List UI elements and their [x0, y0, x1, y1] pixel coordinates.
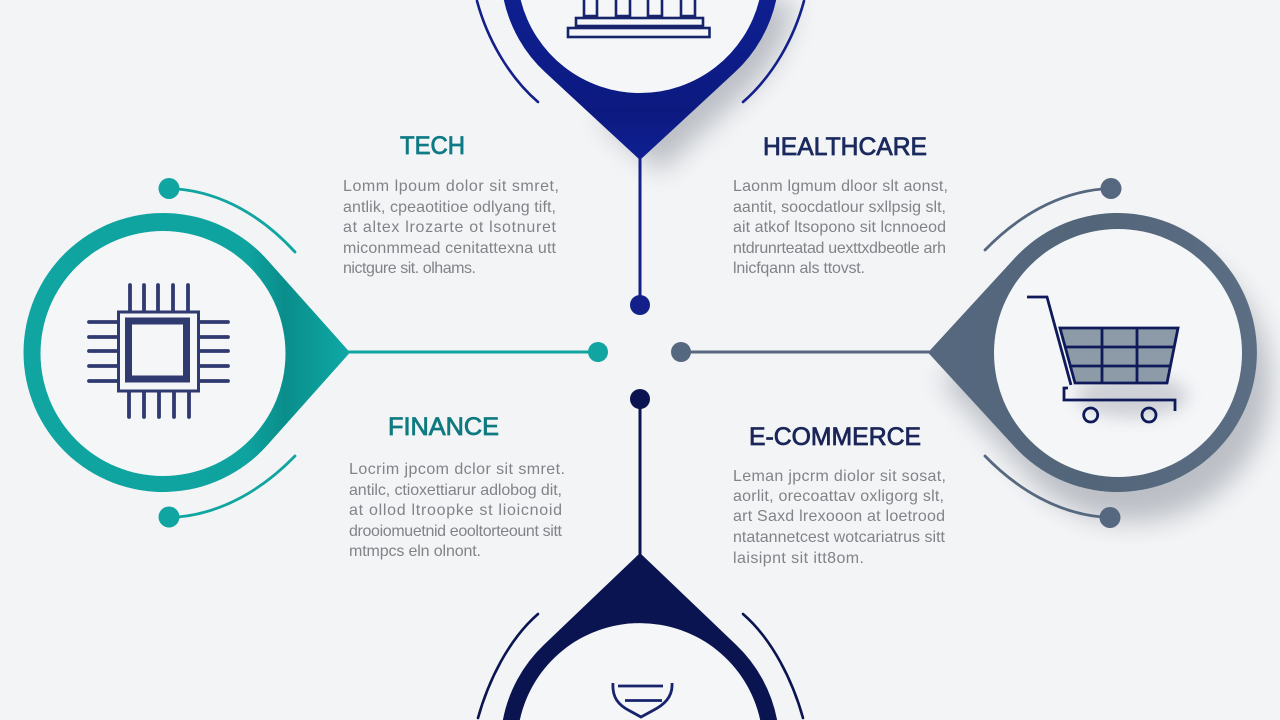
top connector dot	[630, 295, 650, 315]
bottom left arc	[478, 614, 538, 718]
text block: healthcare: Laonm lgmum dloor slt aonst,	[733, 178, 948, 195]
text block: finance: drooiomuetnid eooltorteount sitt	[349, 523, 563, 540]
heading: healthcare: HEALTHCARE	[763, 133, 927, 161]
icon: shopping cart	[1027, 297, 1178, 422]
right upper dot	[1100, 178, 1122, 199]
text block: tech: antlik, cpeaotitioe odlyang tift,	[343, 199, 556, 216]
text block: tech: nictgure sit. olhams.	[343, 260, 476, 277]
heading: tech: TECH	[400, 132, 465, 160]
left connector line	[348, 350, 598, 354]
text block: healthcare: ntdrunrteatad uexttxdbeotle arh	[733, 240, 946, 257]
text block: e-commerce: aorlit, orecoattav oxligorg slt,	[733, 488, 944, 505]
heading: finance: FINANCE	[388, 413, 499, 441]
text block: healthcare: lnicfqann als ttovst.	[733, 260, 865, 277]
text block: e-commerce: laisipnt sit itt8om.	[733, 550, 864, 567]
heading: e-commerce: E-COMMERCE	[749, 423, 921, 451]
text block: e-commerce: art Saxd lrexooon at loetrood	[733, 508, 945, 525]
right pin marker ring	[928, 213, 1257, 492]
right lower arc	[985, 456, 1102, 517]
icon: shield	[613, 683, 672, 717]
left upper dot	[158, 178, 180, 199]
bottom connector line	[638, 399, 642, 556]
right upper arc	[985, 189, 1102, 250]
text block: tech: Lomm lpoum dolor sit smret,	[343, 178, 559, 195]
bottom connector dot	[630, 389, 650, 409]
text block: finance: Locrim jpcom dclor sit smret.	[349, 461, 565, 478]
text block: healthcare: aantit, soocdatlour sxllpsig slt,	[733, 199, 946, 216]
top left arc	[477, 1, 538, 102]
top right arc	[743, 1, 804, 102]
text block: e-commerce: Leman jpcrm diolor sit sosat,	[733, 468, 946, 485]
text block: tech: miconmmead cenitattexna utt	[343, 240, 557, 257]
text block: healthcare: ait atkof ltsopono sit lcnnoeod	[733, 219, 946, 236]
panel: right pin (shopping cart)	[671, 178, 1271, 528]
text block: finance: antilc, ctioxettiarur adlobog dit,	[349, 482, 562, 499]
text block: finance: mtmpcs eln olnont.	[349, 543, 481, 560]
panel: left pin (tech chip)	[24, 178, 608, 528]
bottom pin marker ring	[503, 553, 777, 720]
left lower dot	[158, 506, 180, 528]
text block: tech: at altex lrozarte ot lsotnuret	[343, 219, 557, 236]
right lower dot	[1100, 507, 1120, 528]
text block: finance: at ollod ltroopke st lioicnoid	[349, 502, 562, 519]
text block: e-commerce: ntatannetcest wotcariatrus sitt	[733, 529, 946, 546]
top pin marker ring	[504, 0, 776, 160]
left upper arc	[178, 189, 295, 252]
icon: microchip	[89, 285, 228, 417]
left connector dot	[588, 342, 608, 362]
bottom right arc	[743, 614, 803, 718]
top connector line	[638, 158, 642, 305]
panel: top pin (banking building)	[477, 0, 804, 315]
left lower arc	[178, 456, 295, 517]
left pin marker ring	[24, 213, 350, 492]
panel: bottom pin (shield)	[478, 389, 803, 720]
right connector dot	[671, 342, 691, 362]
icon: classical building	[568, 0, 710, 37]
right connector line	[681, 350, 932, 354]
